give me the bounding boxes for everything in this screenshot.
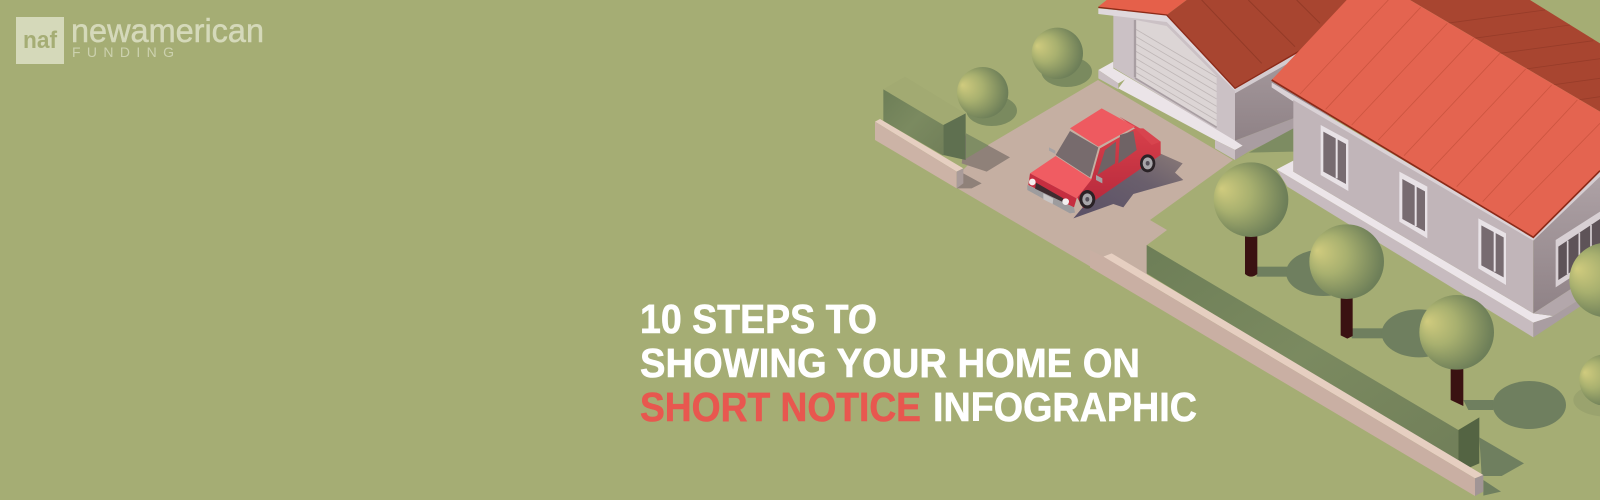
garage roof (1098, 0, 1187, 15)
front wall (1293, 98, 1533, 313)
title (640, 296, 1197, 430)
right hedge and wall (1090, 245, 1524, 496)
front roof slope (1272, 0, 1600, 237)
rear roof slope (1410, 0, 1600, 112)
logo: FUNDING (72, 44, 174, 60)
title: INFOGRAPHIC (933, 384, 1197, 430)
car shadow (1073, 153, 1183, 218)
logo: newamerican (71, 12, 264, 49)
left hedge and wall (875, 77, 1010, 188)
window 1 (1321, 125, 1348, 191)
tree 3 (1419, 295, 1566, 429)
tree 1 (1214, 162, 1361, 296)
garage fascia (1098, 8, 1235, 91)
window 3 (1478, 218, 1506, 285)
logo: naf (23, 27, 58, 54)
garage (1098, 0, 1350, 160)
gable wall (1533, 173, 1600, 313)
house foundation (1277, 169, 1533, 337)
driveway (957, 80, 1233, 300)
garage wall (1113, 10, 1235, 141)
fascia (1272, 83, 1533, 241)
title: SHOWING YOUR HOME ON (640, 340, 1140, 386)
garage foundation (1098, 62, 1250, 150)
title: 10 STEPS TO (640, 296, 877, 342)
title: SHORT NOTICE (640, 384, 921, 430)
tree 4 (1569, 243, 1600, 317)
main house (1235, 0, 1600, 337)
bushes (957, 28, 1092, 126)
bush 3 (1573, 354, 1600, 417)
trees (1214, 162, 1600, 429)
garage door (1135, 20, 1217, 127)
gable window (1556, 212, 1600, 287)
tree 2 (1309, 224, 1456, 357)
window 2 (1399, 172, 1427, 238)
car (1027, 108, 1183, 218)
logo (16, 12, 264, 64)
rear lawn shadow (1235, 128, 1293, 160)
